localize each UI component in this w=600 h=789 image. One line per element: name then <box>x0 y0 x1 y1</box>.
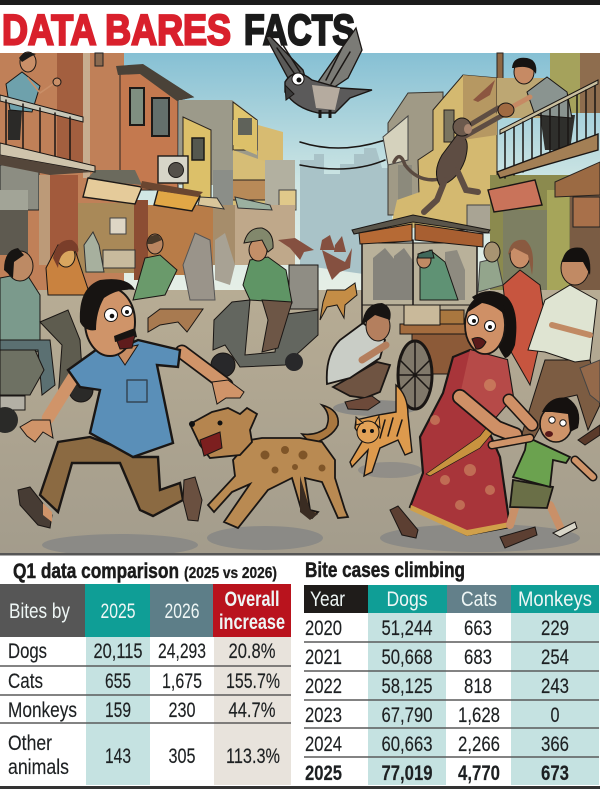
orange dog in background <box>320 283 357 320</box>
right balcony <box>497 80 598 178</box>
data rows: 20.8% <box>228 640 276 663</box>
data rows: 2020 <box>305 617 342 640</box>
data rows: 44.7% <box>228 699 276 722</box>
heading: Q1 data comparison <box>13 560 179 583</box>
data rows: 2,266 <box>458 733 500 756</box>
left buildings <box>0 53 296 303</box>
data rows: 1,628 <box>458 704 500 727</box>
data rows: 1,675 <box>162 670 202 693</box>
heading: (2025 vs 2026) <box>184 565 277 582</box>
left scooter <box>0 310 93 433</box>
data rows: 50,668 <box>382 646 432 669</box>
woman in orange sari <box>46 240 90 295</box>
data rows: 366 <box>541 733 569 756</box>
header row: Monkeys <box>518 588 592 611</box>
street <box>0 290 600 555</box>
background people right <box>478 240 600 445</box>
title: FACTS <box>244 6 355 54</box>
man: trousers <box>40 437 183 516</box>
data rows: 113.3% <box>226 745 280 768</box>
data rows: 2023 <box>305 704 342 727</box>
man: sandals <box>18 487 52 528</box>
header row: 2025 <box>100 600 136 623</box>
data rows: 2024 <box>305 733 342 756</box>
data rows: 673 <box>541 762 569 785</box>
rider on grey scooter <box>211 228 318 377</box>
data rows: 60,663 <box>382 733 432 756</box>
data rows: 143 <box>105 745 131 768</box>
woman: head <box>472 291 516 358</box>
data rows: 254 <box>541 646 569 669</box>
header row: 2026 <box>164 600 200 623</box>
pedestrian <box>183 233 215 300</box>
woman: sari <box>410 350 513 535</box>
data rows: 663 <box>464 617 492 640</box>
data rows: Cats <box>8 670 43 693</box>
header row: Dogs <box>386 588 428 611</box>
background people left <box>0 232 235 433</box>
illustration: street scene <box>0 28 600 556</box>
column shading <box>368 613 599 785</box>
data rows: 2022 <box>305 675 342 698</box>
man: shirt <box>68 340 180 457</box>
header row: Year <box>310 588 345 611</box>
data rows: 24,293 <box>158 640 206 663</box>
data rows: 2021 <box>305 646 342 669</box>
woman: sandals <box>390 506 418 538</box>
data rows: 229 <box>541 617 569 640</box>
data rows: 155.7% <box>226 670 280 693</box>
crow <box>266 28 372 118</box>
heading: Bite cases climbing <box>305 559 465 582</box>
man on right balcony <box>498 58 575 150</box>
bottom bar <box>0 786 600 789</box>
monkey <box>394 108 503 212</box>
man: head <box>85 288 135 356</box>
data rows: 243 <box>541 675 569 698</box>
man: arms <box>48 378 73 418</box>
silhouette dogs <box>278 235 352 280</box>
data rows: 818 <box>464 675 492 698</box>
header row <box>304 585 599 613</box>
top bar <box>0 0 600 5</box>
title: DATA BARES <box>2 6 231 54</box>
centre buildings <box>383 75 497 233</box>
data rows: 0 <box>550 704 560 727</box>
data rows: 683 <box>464 646 492 669</box>
data rows: 230 <box>168 699 196 722</box>
data rows: 159 <box>105 699 131 722</box>
table: Q1 data comparison <box>0 560 291 785</box>
data rows: 51,244 <box>382 617 433 640</box>
data rows: 655 <box>105 670 131 693</box>
header row: Cats <box>461 588 497 611</box>
distant city <box>300 148 392 278</box>
left balcony <box>0 52 95 175</box>
column shading <box>86 637 291 785</box>
data rows: 20,115 <box>94 640 142 663</box>
woman: arms <box>460 397 515 435</box>
header row <box>0 584 291 637</box>
man on left balcony <box>6 52 61 140</box>
old man in shop <box>84 232 104 272</box>
data rows: Dogs <box>8 640 47 663</box>
data rows: Monkeys <box>8 699 77 722</box>
data rows <box>305 617 569 785</box>
header row: Overall <box>224 588 280 611</box>
dog at right edge <box>580 360 600 403</box>
data rows: 77,019 <box>382 762 432 785</box>
right building <box>488 53 600 370</box>
man in green shirt on motorbike <box>133 234 177 300</box>
snarling dog <box>189 405 348 528</box>
crouching man <box>327 303 391 410</box>
header row: Bites by <box>9 600 70 623</box>
white table area <box>0 555 600 789</box>
data rows: Other <box>8 732 52 755</box>
child <box>492 398 593 537</box>
data rows: 2025 <box>305 762 342 785</box>
woman in sari with child <box>390 291 593 548</box>
header row: increase <box>219 611 285 634</box>
small brown dog <box>148 309 203 332</box>
data rows: 305 <box>168 745 196 768</box>
data rows: 58,125 <box>382 675 432 698</box>
bald man on scooter <box>0 248 55 395</box>
running man <box>18 279 244 528</box>
shopfronts <box>0 165 39 210</box>
sky <box>0 53 600 293</box>
road shadows <box>42 400 580 556</box>
woman in red sari <box>503 240 545 385</box>
food cart <box>352 215 490 409</box>
data rows <box>8 640 280 779</box>
data rows: 67,790 <box>382 704 432 727</box>
data rows: 4,770 <box>458 762 500 785</box>
data rows: animals <box>8 756 69 779</box>
orange cat <box>350 385 412 476</box>
man in white shirt <box>520 248 600 445</box>
table: Bite cases climbing <box>304 559 599 785</box>
